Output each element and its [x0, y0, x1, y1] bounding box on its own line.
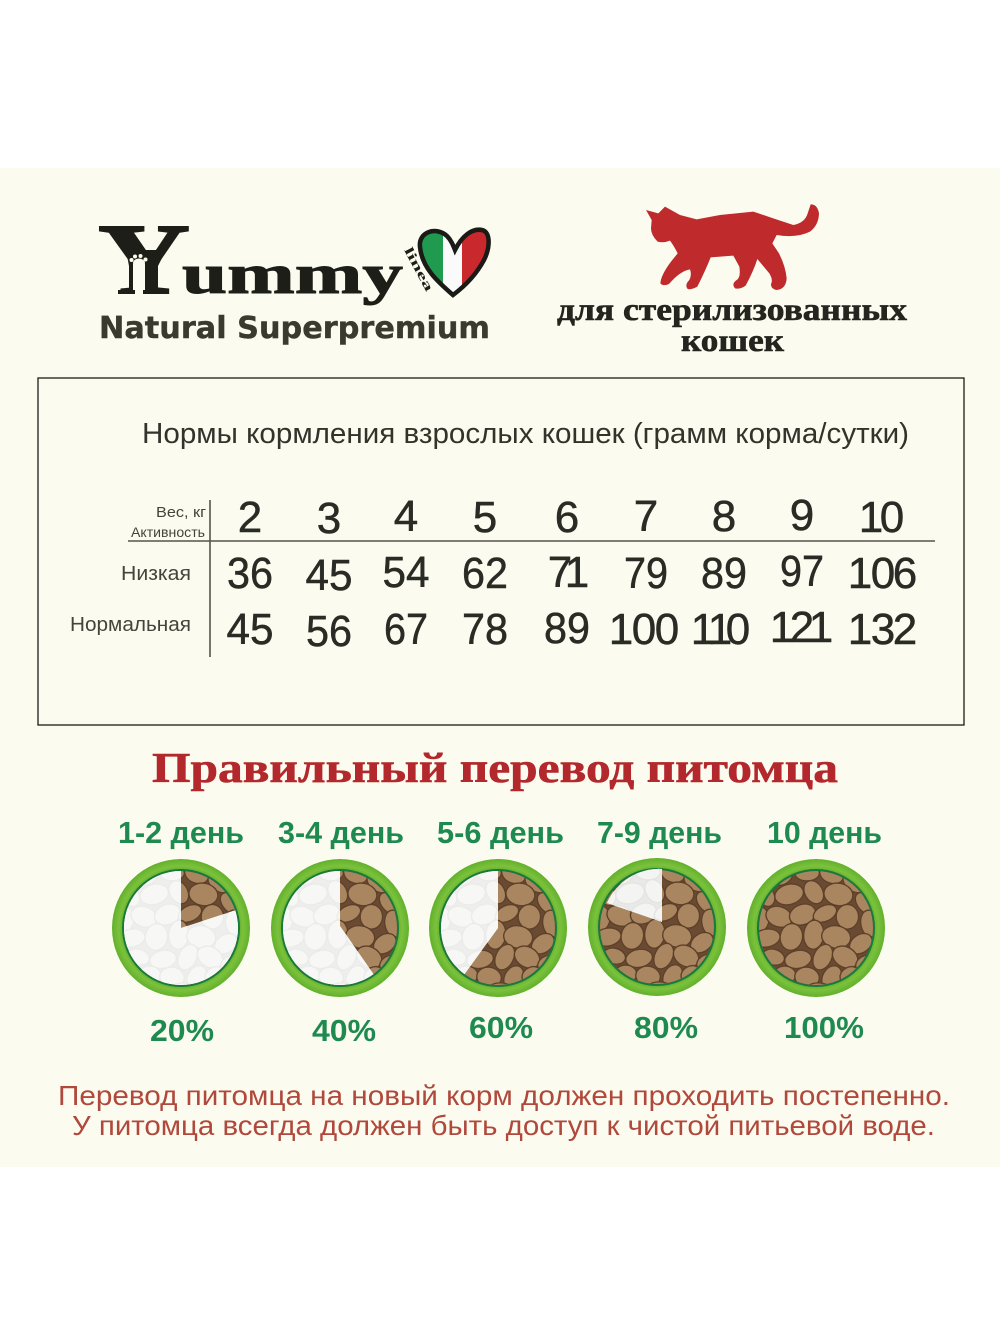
low activity row: 62	[462, 549, 508, 598]
footer note: Перевод питомца на новый корм должен проходить постепенно.	[58, 1080, 950, 1111]
row and column captions: Активность	[131, 524, 205, 540]
panel: feeding norms table	[38, 378, 964, 725]
normal activity row: 67	[384, 605, 428, 654]
logo wordmark	[98, 203, 403, 315]
normal activity row: 132	[848, 605, 917, 654]
day labels: 3-4 день	[278, 815, 404, 850]
footer note	[58, 1080, 950, 1141]
weight header row: 9	[790, 491, 814, 540]
weight header row	[238, 491, 904, 543]
weight header row: 10	[859, 493, 904, 542]
normal activity row: 121	[770, 603, 833, 652]
low activity row	[227, 547, 917, 600]
weight header row: 6	[555, 493, 579, 542]
low activity row: 45	[306, 551, 352, 600]
weight header row: 2	[238, 493, 262, 542]
bowl: 20 percent	[112, 859, 250, 997]
low activity row: 106	[848, 549, 917, 598]
bowl: 40 percent	[271, 859, 409, 997]
logo wordmark: ummy	[182, 244, 403, 306]
row and column captions: Нормальная	[70, 614, 191, 636]
normal activity row: 100	[609, 605, 679, 654]
normal activity row	[226, 603, 917, 656]
Y leg detail	[118, 250, 167, 294]
product subtitle: кошек	[681, 322, 785, 358]
low activity row: 89	[701, 549, 747, 598]
day labels: 1-2 день	[118, 815, 244, 850]
weight header row: 3	[317, 494, 341, 543]
bowl: 100 percent	[747, 859, 885, 997]
table heading: Нормы кормления взрослых кошек (грамм корма/сутки)	[142, 418, 909, 450]
normal activity row: 56	[306, 607, 352, 656]
percent labels: 40%	[312, 1013, 376, 1048]
weight header row: 8	[712, 492, 736, 541]
logo tagline: Natural Superpremium	[99, 311, 490, 346]
product subtitle	[557, 291, 907, 358]
logo wordmark: Y	[98, 203, 190, 315]
normal activity row: 78	[462, 605, 508, 654]
normal activity row: 110	[691, 605, 750, 654]
product subtitle: для стерилизованных	[557, 291, 907, 327]
bowl: 60 percent	[429, 859, 567, 997]
low activity row: 54	[382, 548, 430, 597]
normal activity row: 45	[226, 605, 274, 654]
page background	[0, 168, 1000, 1167]
small rotated wordmark: linea	[401, 244, 438, 295]
weight header row: 5	[473, 493, 497, 542]
percent labels: 20%	[150, 1013, 214, 1048]
brand logo	[98, 226, 491, 345]
row and column captions: Низкая	[121, 563, 191, 585]
percent labels: 100%	[784, 1010, 864, 1045]
low activity row: 71	[548, 548, 589, 597]
transition section heading: Правильный перевод питомца	[152, 746, 838, 792]
weight header row: 4	[394, 492, 418, 541]
normal activity row: 89	[544, 604, 590, 653]
row and column captions	[70, 504, 207, 636]
day labels: 7-9 день	[597, 815, 722, 850]
row and column captions: Вес, кг	[156, 504, 207, 521]
icon: red cat silhouette	[646, 204, 819, 290]
icon: paw	[130, 254, 148, 295]
low activity row: 79	[624, 549, 668, 598]
icon: italian flag heart	[418, 227, 491, 298]
weight header row: 7	[634, 492, 658, 541]
low activity row: 97	[780, 547, 824, 596]
day labels: 10 день	[767, 815, 882, 850]
day labels	[118, 815, 882, 850]
percent labels: 60%	[469, 1010, 533, 1045]
low activity row: 36	[227, 549, 273, 598]
footer note: У питомца всегда должен быть доступ к чистой питьевой воде.	[72, 1110, 935, 1141]
percent labels	[150, 1010, 864, 1048]
bowl: 80 percent	[588, 858, 726, 996]
day labels: 5-6 день	[437, 815, 564, 850]
percent labels: 80%	[634, 1010, 698, 1045]
